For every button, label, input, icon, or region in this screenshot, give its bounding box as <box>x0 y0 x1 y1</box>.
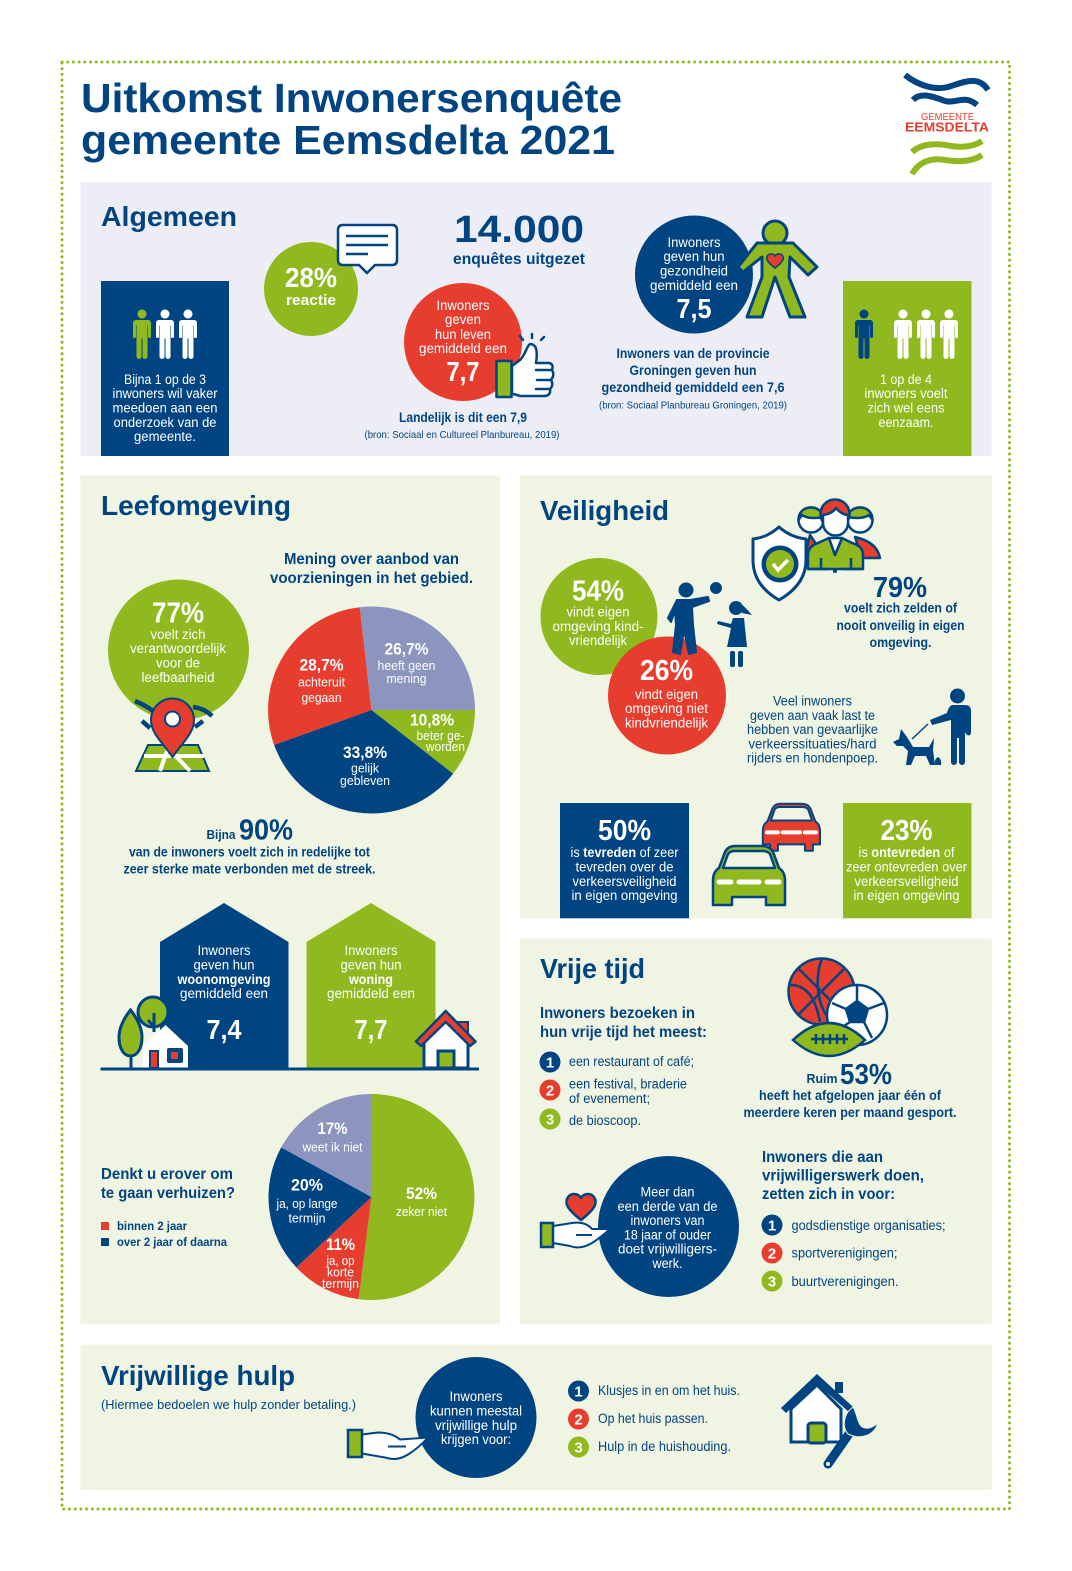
pie chart: voorzieningen: gegaan <box>302 691 342 705</box>
circle: 28% reactie <box>264 242 358 336</box>
icon: group of people <box>798 500 880 572</box>
logo: gemeente Eemsdelta: GEMEENTE <box>921 112 974 123</box>
card: 1 op de 4: zich wel eens <box>868 400 945 416</box>
list: bezoeken <box>540 1052 694 1130</box>
stat: ruim 53% <box>744 1059 956 1120</box>
icon: speech bubble <box>338 225 397 273</box>
icon: person with dog <box>893 688 971 765</box>
circle: meer dan een derde: een derde van de <box>618 1199 718 1214</box>
text: mening over aanbod: voorzieningen in het gebied. <box>270 570 473 587</box>
text: toelichting: (Hiermee bedoelen we hulp zonder betaling.) <box>101 1398 356 1412</box>
icon: house and wrench <box>782 1375 878 1466</box>
text: vrijwilligerswerk: vrijwilligerswerk doen, <box>762 1168 924 1184</box>
card: bijna 1 op de 3 <box>101 281 229 456</box>
text: mening over aanbod <box>270 551 473 587</box>
circle: meer dan een derde: werk. <box>652 1256 682 1271</box>
house card: woonomgeving 7,4: gemiddeld een <box>180 986 268 1001</box>
circle: leven 7,7: Inwoners <box>436 298 490 313</box>
pie chart: verhuizen: ja, op <box>326 1254 355 1268</box>
text: vrijwilligerswerk <box>762 1149 924 1203</box>
list: vrijwilligerswerk: 1 <box>768 1218 776 1234</box>
circle: 26%: 26% <box>640 655 693 687</box>
circle: gezondheid 7,5: geven hun <box>664 249 724 264</box>
list: hulp: 1 <box>574 1384 583 1400</box>
note: provincie groningen: Groningen geven hun <box>630 363 756 378</box>
card: 50% tevreden: tevreden over de <box>576 860 674 874</box>
title: Uitkomst Inwonersenquête <box>81 75 622 121</box>
text: inwoners bezoeken: hun vrije tijd het meest: <box>540 1024 707 1041</box>
pie chart: verhuizen <box>268 1094 474 1300</box>
legend: binnen 2 jaar <box>117 1221 188 1233</box>
pie chart: verhuizen: 17% <box>318 1119 348 1138</box>
panel: vrije tijd <box>520 938 992 1324</box>
panel background <box>520 938 992 1324</box>
list: hulp: Op het huis passen. <box>598 1411 708 1426</box>
pie chart: voorzieningen: achteruit <box>298 676 346 690</box>
card: 23% ontevreden: is ontevreden of <box>858 845 955 860</box>
stat: bijna 90%: 90% <box>239 814 293 846</box>
circle: vrijwillige hulp krijgen: vrijwillige hulp <box>435 1418 517 1433</box>
circle: 77%: leefbaarheid <box>142 670 214 685</box>
icon: open hand <box>348 1430 428 1459</box>
card: 23% ontevreden <box>843 803 972 918</box>
stat: bijna 90%: van de inwoners voelt zich in redelijke tot <box>129 844 370 860</box>
circle: 54%: 54% <box>572 576 624 608</box>
stat: 79% <box>836 572 964 650</box>
text: mening over aanbod: Mening over aanbod van <box>284 551 459 568</box>
stat: ruim 53%: meerdere keren per maand gesport. <box>744 1105 956 1120</box>
logo: gemeente Eemsdelta <box>905 75 990 174</box>
list: bezoeken: of evenement; <box>569 1091 650 1106</box>
heading: vrije tijd: Vrije tijd <box>540 953 645 984</box>
title <box>81 75 622 163</box>
icon: cars <box>713 804 820 905</box>
card: bijna 1 op de 3: onderzoek van de <box>114 415 216 430</box>
stat: 79%: 79% <box>873 572 927 604</box>
card: 23% ontevreden: verkeersveiligheid <box>854 874 958 889</box>
heading: veiligheid: Veiligheid <box>540 495 669 526</box>
circle: leven 7,7: hun leven <box>435 327 491 342</box>
house card: woning 7,7: gemiddeld een <box>327 986 415 1001</box>
note: provincie groningen: gezondheid gemiddeld een 7,6 <box>602 380 785 395</box>
icon: trees and small house <box>119 997 188 1068</box>
text: veel inwoners <box>747 694 878 766</box>
circle: 54% <box>540 558 658 675</box>
text: veel inwoners: verkeerssituaties/hard <box>748 736 876 752</box>
circle: leven 7,7: 7,7 <box>446 356 480 387</box>
house card: woonomgeving 7,4 <box>160 903 288 1068</box>
card: 1 op de 4: inwoners voelt <box>864 386 948 401</box>
note: provincie groningen <box>599 346 787 412</box>
card: bijna 1 op de 3: gemeente. <box>134 429 196 444</box>
house card: woonomgeving 7,4: woonomgeving <box>177 972 270 987</box>
panel background <box>80 1345 992 1490</box>
circle: 28% reactie: 28% <box>285 262 337 293</box>
heading: vrijwillige hulp: Vrijwillige hulp <box>101 1360 295 1391</box>
house card: woning 7,7 <box>306 903 436 1068</box>
list: bezoeken: 1 <box>546 1054 554 1072</box>
stat: ruim 53%: Ruim <box>806 1071 838 1086</box>
panel: veiligheid <box>520 476 992 918</box>
text: denkt u erover: te gaan verhuizen? <box>101 1185 235 1202</box>
circle: gezondheid 7,5: Inwoners <box>668 235 721 250</box>
circle: meer dan een derde: 18 jaar of ouder <box>624 1228 711 1242</box>
card: 50% tevreden: is tevreden of zeer <box>570 845 679 860</box>
circle: vrijwillige hulp krijgen: krijgen voor: <box>441 1432 511 1447</box>
note: provincie groningen: (bron: Sociaal Planbureau Groningen, 2019) <box>599 400 787 412</box>
icon: adult and child with ball <box>668 582 752 667</box>
heading: algemeen: Algemeen <box>101 201 237 232</box>
card: 23% ontevreden: in eigen omgeving <box>854 888 960 903</box>
stat: 79%: omgeving. <box>870 635 932 650</box>
circle: meer dan een derde: Meer dan <box>640 1184 694 1200</box>
list: vrijwilligerswerk: 3 <box>768 1274 776 1290</box>
circle: 26% <box>608 636 726 754</box>
pie chart: voorzieningen: beter ge- <box>416 729 464 743</box>
pie chart: verhuizen: termijn <box>322 1277 359 1291</box>
icon: house with red roof <box>416 1011 476 1068</box>
list: hulp: Klusjes in en om het huis. <box>598 1383 740 1398</box>
text: denkt u erover: Denkt u erover om <box>101 1166 233 1183</box>
note: landelijk <box>364 410 560 441</box>
pie chart: voorzieningen: 33,8% <box>343 743 387 762</box>
list: hulp: Hulp in de huishouding. <box>598 1439 731 1454</box>
list: vrijwilligerswerk <box>762 1214 946 1292</box>
circle: gezondheid 7,5: gezondheid <box>660 264 728 278</box>
card: 1 op de 4: eenzaam. <box>878 415 934 430</box>
house card: woning 7,7: Inwoners <box>344 943 398 958</box>
text: veel inwoners: geven aan vaak last te <box>750 708 875 723</box>
pie chart: voorzieningen: worden <box>425 740 465 754</box>
panel: vrijwillige hulp <box>80 1345 992 1490</box>
list: vrijwilligerswerk: godsdienstige organisaties; <box>792 1218 946 1233</box>
circle: 54%: vriendelijk <box>569 633 627 648</box>
note: landelijk: Landelijk is dit een 7,9 <box>399 410 527 425</box>
circle: 54%: omgeving kind- <box>552 619 644 634</box>
circle: vrijwillige hulp krijgen: kunnen meestal <box>430 1404 522 1418</box>
circle: 77%: verantwoordelijk <box>130 641 226 656</box>
house card: woonomgeving 7,4: Inwoners <box>198 943 251 958</box>
card: bijna 1 op de 3: Bijna 1 op de 3 <box>124 372 206 387</box>
pie chart: voorzieningen: 10,8% <box>410 710 454 730</box>
list: bezoeken: de bioscoop. <box>569 1113 641 1128</box>
pie chart: voorzieningen: 26,7% <box>384 640 428 658</box>
circle: leven 7,7 <box>404 283 522 401</box>
pie chart: voorzieningen: heeft geen <box>378 659 436 673</box>
circle: vrijwillige hulp krijgen <box>416 1357 536 1478</box>
icon: shield <box>753 527 806 600</box>
legend: over 2 jaar of daarna <box>117 1237 228 1249</box>
house card: woning 7,7: woning <box>348 972 393 987</box>
stat: bijna 90%: zeer sterke mate verbonden met de streek. <box>124 862 376 876</box>
icon: thumbs up <box>496 334 553 397</box>
circle: 77%: voelt zich <box>150 627 206 642</box>
list: vrijwilligerswerk: buurtverenigingen. <box>792 1274 898 1289</box>
pie chart: verhuizen: ja, op lange <box>276 1197 338 1211</box>
panel: algemeen <box>80 182 992 456</box>
house card: woning 7,7: geven hun <box>340 958 402 972</box>
card: 50% tevreden: in eigen omgeving <box>572 888 678 903</box>
card: 23% ontevreden: zeer ontevreden over <box>846 860 967 874</box>
stat: 14.000 enquetes <box>453 209 585 268</box>
card: 23% ontevreden: 23% <box>880 815 933 847</box>
stat: 79%: nooit onveilig in eigen <box>836 618 964 633</box>
pie chart: verhuizen: 52% <box>406 1184 437 1203</box>
stat: 14.000 enquetes: enquêtes uitgezet <box>453 251 585 268</box>
list: bezoeken: een restaurant of café; <box>569 1054 694 1069</box>
panel background <box>80 182 992 456</box>
title: gemeente Eemsdelta 2021 <box>81 117 615 163</box>
card: 50% tevreden: 50% <box>598 815 651 847</box>
list: bezoeken: 3 <box>546 1112 554 1128</box>
panel: leefomgeving <box>80 476 500 1324</box>
text: veel inwoners: Veel inwoners <box>773 694 852 708</box>
pie chart: voorzieningen: mening <box>386 672 427 686</box>
circle: leven 7,7: geven <box>445 312 481 327</box>
card: 50% tevreden: verkeersveiligheid <box>572 874 676 889</box>
house card: woonomgeving 7,4: 7,4 <box>206 1014 242 1045</box>
pie chart: voorzieningen: gelijk <box>351 762 380 776</box>
card: bijna 1 op de 3: meedoen aan een <box>112 400 218 416</box>
circle: meer dan een derde: inwoners van <box>630 1213 704 1228</box>
circle: gezondheid 7,5: gemiddeld een <box>650 278 738 293</box>
stat: ruim 53%: heeft het afgelopen jaar één of <box>759 1088 941 1103</box>
pie chart: verhuizen: korte <box>327 1266 354 1280</box>
list: bezoeken: 2 <box>546 1082 554 1100</box>
circle: 26%: kindvriendelijk <box>625 716 708 730</box>
stat: 79%: voelt zich zelden of <box>844 600 957 616</box>
circle: leven 7,7: gemiddeld een <box>419 341 507 356</box>
pie chart: voorzieningen: gebleven <box>340 774 390 788</box>
icon: sport balls <box>788 958 887 1056</box>
stat: 14.000 enquetes: 14.000 <box>454 209 584 251</box>
ground line <box>100 1068 479 1070</box>
stat: ruim 53%: 53% <box>840 1059 892 1091</box>
icon: hand with heart <box>541 1194 610 1247</box>
circle: meer dan een derde <box>598 1156 739 1297</box>
circle: 26%: vindt eigen <box>635 687 698 702</box>
text: denkt u erover <box>101 1166 235 1202</box>
pie chart: voorzieningen <box>268 607 475 813</box>
card: 1 op de 4 <box>843 281 972 456</box>
text: vrijwilligerswerk: Inwoners die aan <box>762 1149 883 1166</box>
circle: meer dan een derde: doet vrijwilligers- <box>618 1242 717 1256</box>
text: veel inwoners: hebben van gevaarlijke <box>747 722 878 737</box>
icon: map pin <box>135 699 212 771</box>
panel background <box>520 476 992 918</box>
text: vrijwilligerswerk: zetten zich in voor: <box>762 1186 895 1203</box>
circle: gezondheid 7,5 <box>635 216 753 334</box>
pie chart: voorzieningen: 28,7% <box>300 656 344 674</box>
list: hulp: 3 <box>574 1440 583 1456</box>
panel background <box>80 476 500 1324</box>
legend <box>101 1221 228 1249</box>
circle: 77% <box>108 580 249 720</box>
card: 1 op de 4: 1 op de 4 <box>880 372 932 387</box>
list: vrijwilligerswerk: sportverenigingen; <box>792 1246 898 1260</box>
text: inwoners bezoeken: Inwoners bezoeken in <box>540 1005 695 1022</box>
pie chart: verhuizen: 11% <box>326 1235 355 1254</box>
pie chart: verhuizen: termijn <box>288 1212 326 1226</box>
house card: woning 7,7: 7,7 <box>354 1014 388 1045</box>
circle: gezondheid 7,5: 7,5 <box>676 293 712 324</box>
card: bijna 1 op de 3: inwoners wil vaker <box>112 386 218 401</box>
text: veel inwoners: rijders en hondenpoep. <box>747 750 878 766</box>
pie chart: verhuizen: weet ik niet <box>302 1140 363 1154</box>
circle: 26%: omgeving niet <box>625 701 708 716</box>
circle: 28% reactie: reactie <box>286 292 336 309</box>
circle: 54%: vindt eigen <box>566 604 630 620</box>
card: 50% tevreden <box>560 803 689 918</box>
pie chart: verhuizen: 20% <box>291 1176 323 1194</box>
pie chart: verhuizen: zeker niet <box>396 1205 447 1219</box>
list: hulp: 2 <box>574 1412 583 1428</box>
house card: woonomgeving 7,4: geven hun <box>194 958 254 972</box>
logo: gemeente Eemsdelta: EEMSDELTA <box>905 120 990 134</box>
stat: bijna 90%: Bijna <box>206 827 236 842</box>
stat: bijna 90% <box>124 814 376 876</box>
note: provincie groningen: Inwoners van de provincie <box>616 346 770 361</box>
note: landelijk: (bron: Sociaal en Cultureel Planbureau, 2019) <box>364 429 560 441</box>
text: inwoners bezoeken <box>540 1005 707 1041</box>
list: hulp <box>568 1380 740 1458</box>
icon: body with heart <box>738 221 817 317</box>
circle: 77%: 77% <box>152 598 204 630</box>
list: vrijwilligerswerk: 2 <box>768 1246 776 1262</box>
heading: leefomgeving: Leefomgeving <box>101 490 291 521</box>
circle: 77%: voor de <box>156 656 200 670</box>
circle: vrijwillige hulp krijgen: Inwoners <box>450 1389 503 1404</box>
list: bezoeken: een festival, braderie <box>569 1076 687 1092</box>
